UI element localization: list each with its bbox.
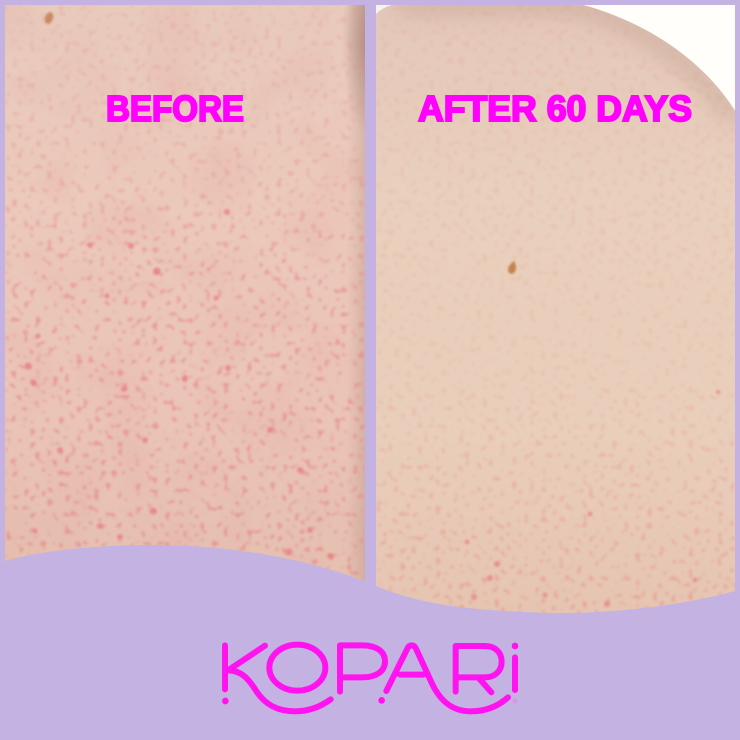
panel: after 60 days photo	[376, 4, 736, 615]
heading: before: BEFORE	[106, 88, 244, 129]
logo letter i	[512, 643, 518, 690]
white background corner	[580, 4, 736, 112]
registered mark: ®	[513, 697, 518, 705]
logo letter K with underline swash	[222, 645, 331, 711]
panel: before photo	[5, 0, 394, 585]
shaded shoulder edge	[400, 4, 735, 120]
logo: Kopari	[222, 643, 518, 711]
mole	[43, 11, 55, 25]
logo letter O	[269, 645, 325, 691]
mole	[508, 261, 516, 274]
logo letter P	[340, 645, 385, 692]
logo letter A with swash	[378, 645, 508, 711]
logo letter R	[456, 646, 502, 692]
heading: after 60 days: AFTER 60 DAYS	[418, 88, 692, 129]
